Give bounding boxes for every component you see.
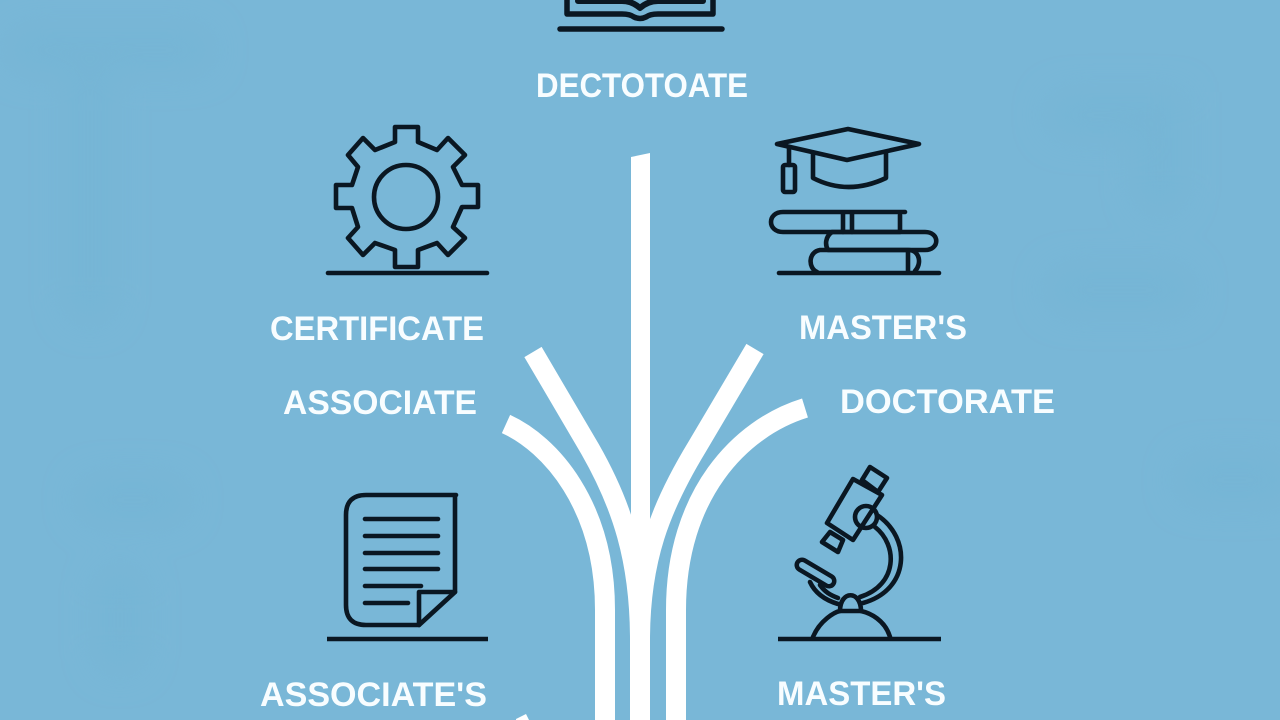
- central trunk: [631, 153, 650, 720]
- label: associate: ASSOCIATE: [283, 384, 477, 422]
- outer left branch: [506, 424, 605, 720]
- label: master's lower: MASTER'S: [777, 675, 946, 713]
- icon: graduation cap and books: [771, 129, 939, 273]
- label: doctorate right: DOCTORATE: [840, 383, 1055, 421]
- label: master's upper: MASTER'S: [799, 309, 967, 347]
- icon: open book: [560, 0, 722, 29]
- inner left branch: [533, 352, 640, 720]
- outer right branch: [676, 408, 805, 720]
- icon: document: [327, 495, 488, 639]
- label: certificate: CERTIFICATE: [270, 310, 484, 348]
- label: associate's: ASSOCIATE'S: [260, 676, 487, 714]
- label: top doctorate: DECTOTOATE: [536, 67, 748, 105]
- branching tree of paths: [506, 153, 805, 720]
- inner right branch: [640, 349, 755, 720]
- lower left branch stub: [516, 714, 529, 720]
- icon: gear: [328, 127, 487, 273]
- icon: microscope: [778, 467, 941, 639]
